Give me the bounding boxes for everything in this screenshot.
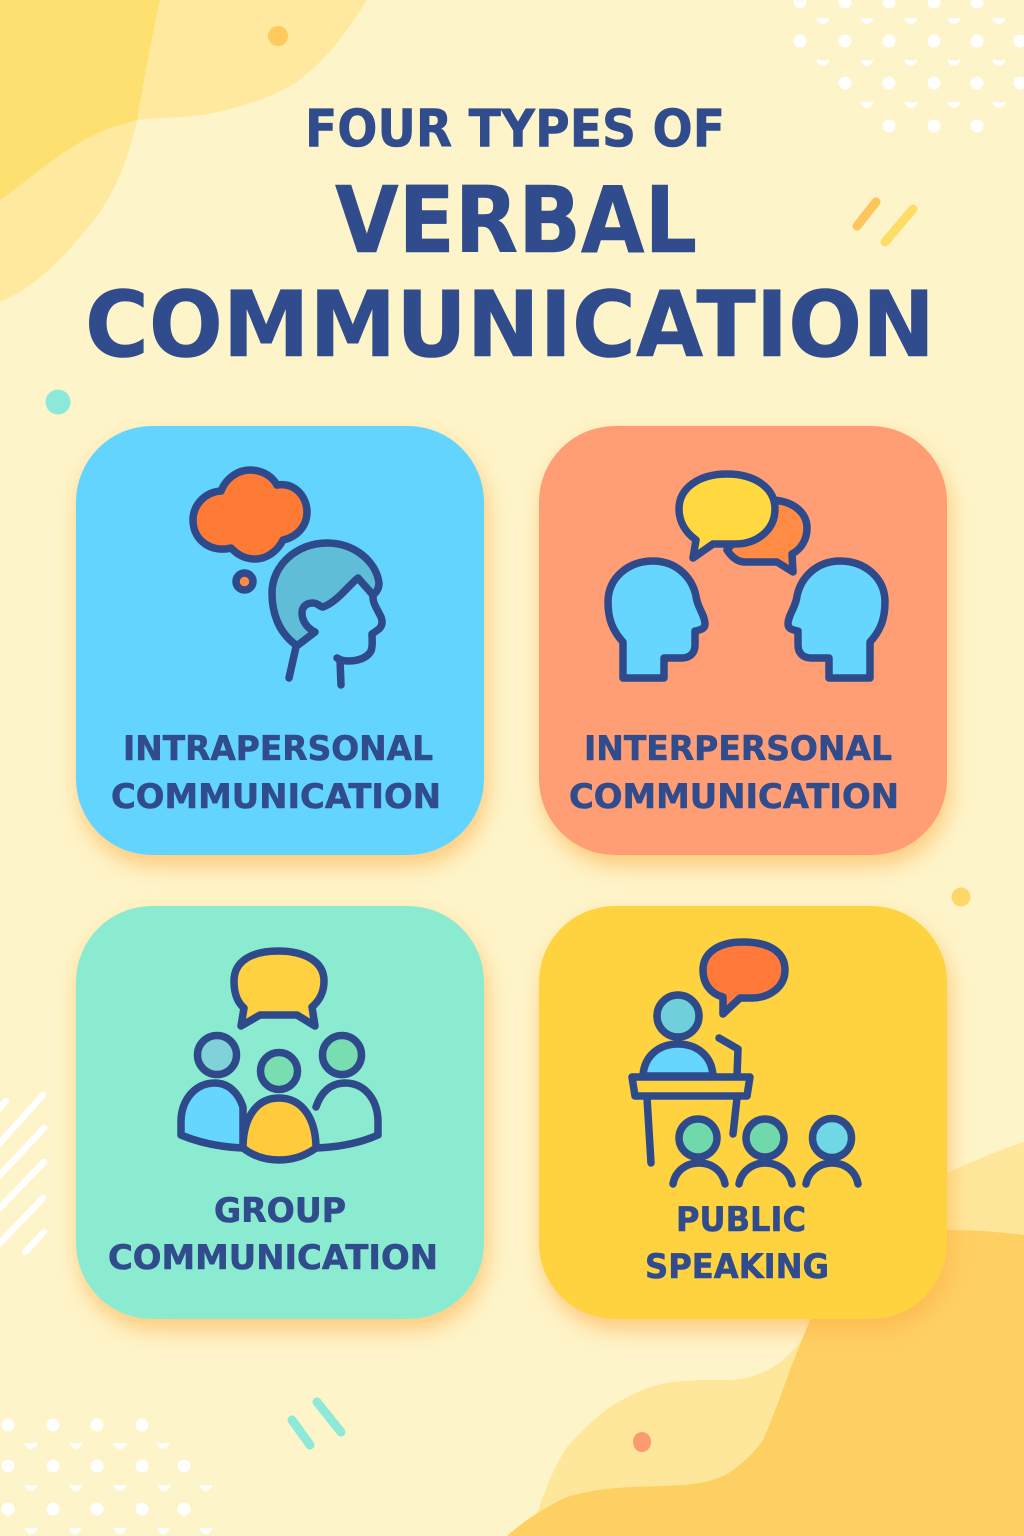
audience member 3 bbox=[812, 1118, 852, 1158]
lectern bbox=[632, 1077, 750, 1096]
thought cloud bbox=[193, 470, 307, 559]
panel: interpersonal communication bbox=[539, 426, 947, 855]
label bbox=[569, 729, 899, 817]
label: INTERPERSONAL bbox=[584, 729, 892, 769]
card background bbox=[539, 426, 947, 855]
speech bubble bbox=[234, 951, 324, 1026]
orange speech bubble bbox=[727, 500, 807, 572]
audience member 1 bbox=[679, 1119, 717, 1157]
label bbox=[108, 1191, 438, 1278]
panel: intrapersonal communication bbox=[76, 426, 484, 855]
speaker bbox=[657, 995, 699, 1037]
decorative white diagonal lines: left bbox=[0, 1095, 44, 1252]
left head bbox=[608, 561, 705, 678]
center person bbox=[260, 1052, 298, 1090]
thought dot bbox=[236, 573, 253, 590]
label: GROUP bbox=[214, 1191, 346, 1231]
decorative ticks: teal bbox=[292, 1402, 341, 1445]
label: INTRAPERSONAL bbox=[123, 729, 433, 769]
audience member 2 bbox=[746, 1119, 784, 1157]
icon: group of three people bbox=[181, 951, 378, 1160]
card background bbox=[76, 426, 484, 855]
background blobs: top left bbox=[0, 0, 367, 302]
label: COMMUNICATION bbox=[108, 1238, 438, 1278]
label: PUBLIC bbox=[676, 1200, 806, 1240]
icon: person thinking bbox=[193, 470, 382, 685]
card background bbox=[76, 906, 484, 1319]
decorative dots: bottom left bbox=[2, 1418, 212, 1534]
label bbox=[111, 729, 441, 817]
decorative ticks: yellow bbox=[857, 202, 913, 242]
right person bbox=[322, 1036, 362, 1074]
speech bubble bbox=[703, 942, 785, 1014]
title: FOUR TYPES OF bbox=[305, 100, 725, 160]
icon: speaker at lectern with audience bbox=[632, 942, 858, 1184]
background blobs: bottom right bbox=[507, 1142, 1024, 1536]
label: COMMUNICATION bbox=[111, 777, 441, 817]
icon: two heads with speech bubbles bbox=[608, 474, 885, 678]
microphone bbox=[719, 1038, 738, 1076]
label: COMMUNICATION bbox=[569, 777, 899, 817]
label: SPEAKING bbox=[645, 1247, 829, 1287]
panel: group communication bbox=[76, 906, 484, 1319]
left person bbox=[198, 1036, 236, 1074]
decorative dots: top right bbox=[794, 0, 1024, 132]
right head bbox=[788, 561, 885, 678]
title bbox=[85, 100, 935, 378]
title: COMMUNICATION bbox=[85, 273, 935, 378]
card background bbox=[539, 906, 947, 1319]
panel: public speaking bbox=[539, 906, 947, 1319]
yellow speech bubble bbox=[679, 474, 775, 558]
title: VERBAL bbox=[335, 167, 697, 274]
label bbox=[645, 1200, 829, 1287]
